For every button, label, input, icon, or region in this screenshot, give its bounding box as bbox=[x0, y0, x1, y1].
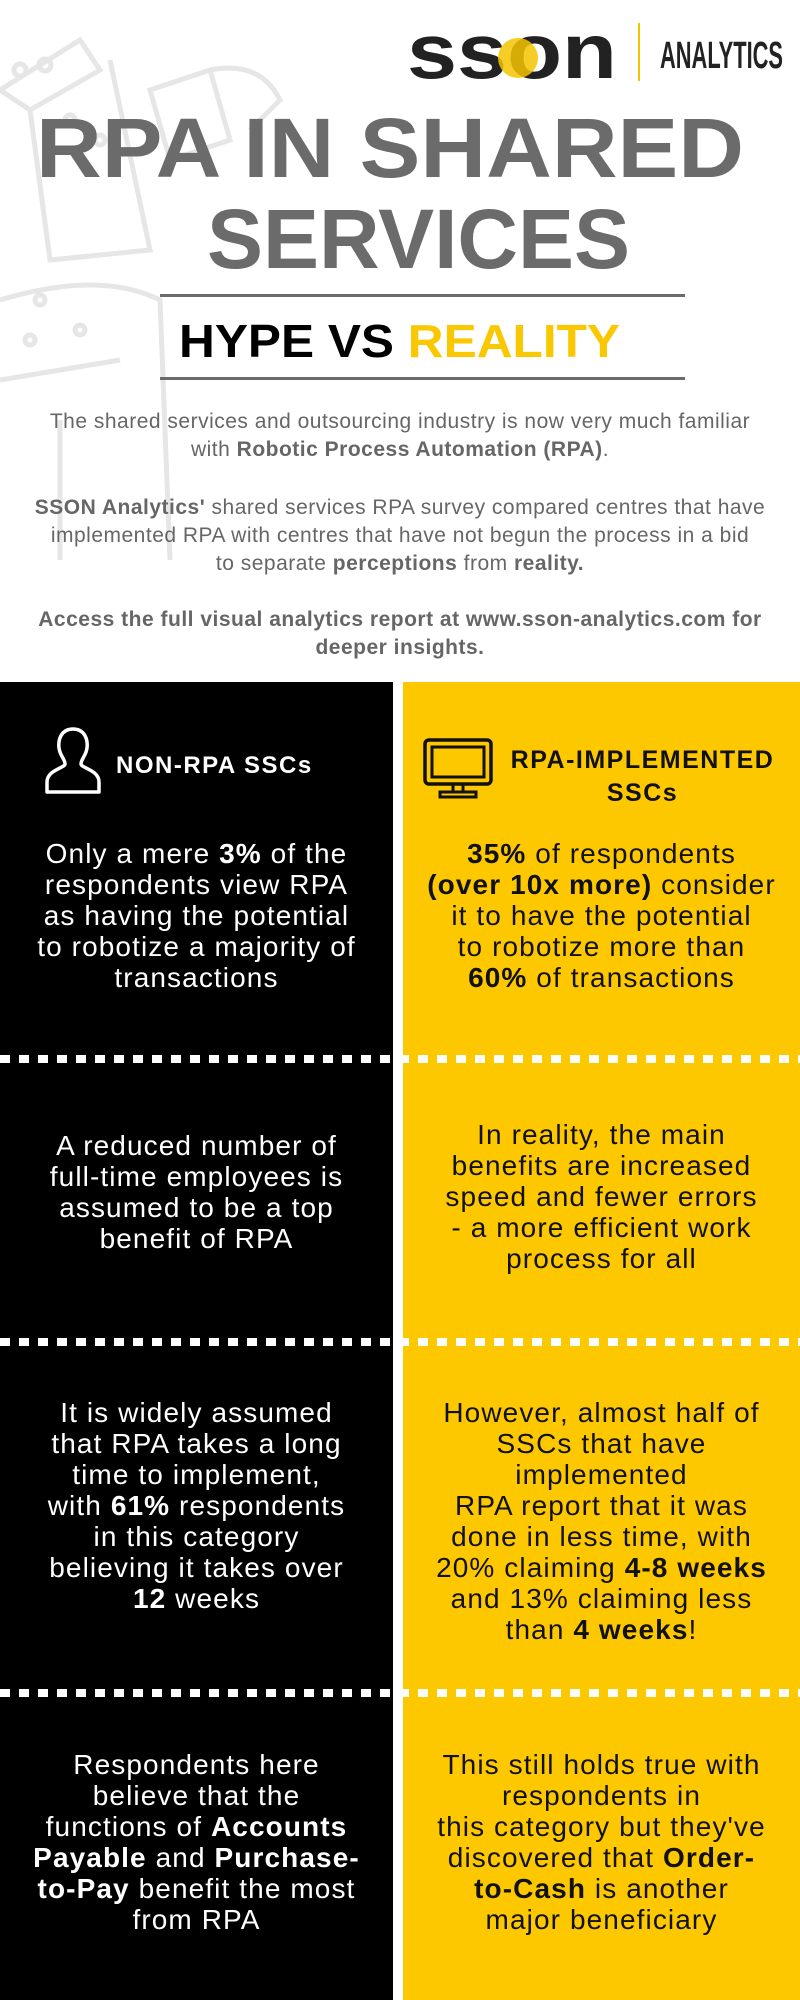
row 3 right: done in less time, with bbox=[451, 1521, 752, 1552]
row 3 right: However, almost half of bbox=[443, 1397, 760, 1428]
row 3 right: RPA report that it was bbox=[455, 1490, 748, 1521]
heading: RPA-implemented: RPA-IMPLEMENTED bbox=[511, 746, 774, 774]
row 1 right: 35% of respondents bbox=[467, 838, 736, 869]
panel: RPA-implemented bbox=[403, 682, 800, 2000]
intro text bbox=[50, 410, 750, 461]
row 3 left: 12 weeks bbox=[133, 1583, 260, 1614]
row 4 left: believe that the bbox=[93, 1780, 300, 1811]
row 3 left: in this category bbox=[94, 1521, 299, 1552]
logo bbox=[407, 18, 783, 88]
row 2 right: speed and fewer errors bbox=[445, 1181, 758, 1212]
row 1 right: 60% of transactions bbox=[468, 962, 735, 993]
row 4 right bbox=[437, 1749, 766, 1935]
row 4 right: this category but they've bbox=[437, 1811, 766, 1842]
access text: Access the full visual analytics report at www.sson-analytics.com for bbox=[38, 608, 762, 631]
row 4 left: Payable and Purchase- bbox=[33, 1842, 360, 1873]
row 3 left: time to implement, bbox=[72, 1459, 321, 1490]
heading: RPA-implemented: SSCs bbox=[607, 779, 678, 807]
row 3 left: that RPA takes a long bbox=[51, 1428, 342, 1459]
panel: non-RPA bbox=[0, 682, 393, 2000]
survey text: SSON Analytics' shared services RPA survey compared centres that have bbox=[35, 496, 765, 519]
row 1 left: transactions bbox=[114, 962, 279, 993]
intro text: with Robotic Process Automation (RPA). bbox=[191, 438, 609, 461]
row 2 left: A reduced number of bbox=[56, 1130, 337, 1161]
row 3 right: implemented bbox=[515, 1459, 688, 1490]
icon: person bbox=[45, 727, 101, 794]
row 2 left: benefit of RPA bbox=[100, 1223, 293, 1254]
survey text bbox=[35, 496, 765, 575]
row 2 right: benefits are increased bbox=[452, 1150, 751, 1181]
row 2 right: In reality, the main bbox=[477, 1119, 726, 1150]
row 4 right: major beneficiary bbox=[486, 1904, 717, 1935]
row 3 right: and 13% claiming less bbox=[451, 1583, 752, 1614]
row 1 right: (over 10x more) consider bbox=[427, 869, 776, 900]
row 3 right bbox=[436, 1397, 767, 1645]
row 2 left: full-time employees is bbox=[50, 1161, 343, 1192]
row 3 left: believing it takes over bbox=[49, 1552, 344, 1583]
title: RPA IN SHARED bbox=[36, 101, 744, 195]
row 1 left: respondents view RPA bbox=[45, 869, 348, 900]
row 4 right: This still holds true with bbox=[442, 1749, 761, 1780]
row 2 right: - a more efficient work bbox=[451, 1212, 752, 1243]
row 1 right: it to have the potential bbox=[451, 900, 752, 931]
row 3 left: It is widely assumed bbox=[60, 1397, 333, 1428]
row 1 left bbox=[37, 838, 356, 993]
heading: RPA-implemented bbox=[511, 746, 774, 807]
row 3 right: 20% claiming 4-8 weeks bbox=[436, 1552, 767, 1583]
row 2 left: assumed to be a top bbox=[59, 1192, 334, 1223]
row 4 left bbox=[33, 1749, 360, 1935]
heading: non-RPA: NON-RPA SSCs bbox=[116, 752, 313, 779]
row 4 right: respondents in bbox=[502, 1780, 701, 1811]
survey text: implemented RPA with centres that have not begun the process in a bid bbox=[51, 524, 749, 547]
background robot sketch bbox=[0, 36, 283, 560]
row 4 left: Respondents here bbox=[73, 1749, 320, 1780]
row 4 right: to-Cash is another bbox=[474, 1873, 729, 1904]
row 4 right: discovered that Order- bbox=[448, 1842, 755, 1873]
access text bbox=[38, 608, 762, 659]
row 3 right: than 4 weeks! bbox=[506, 1614, 697, 1645]
row 1 right bbox=[427, 838, 776, 993]
intro text: The shared services and outsourcing industry is now very much familiar bbox=[50, 410, 750, 433]
row 4 left: functions of Accounts bbox=[46, 1811, 347, 1842]
row 1 right: to robotize more than bbox=[458, 931, 745, 962]
row 4 left: from RPA bbox=[132, 1904, 261, 1935]
row 2 left bbox=[50, 1130, 343, 1254]
survey text: to separate perceptions from reality. bbox=[216, 552, 584, 575]
title bbox=[36, 101, 744, 280]
row 3 right: SSCs that have bbox=[497, 1428, 706, 1459]
row 3 left: with 61% respondents bbox=[48, 1490, 345, 1521]
row 2 right bbox=[445, 1119, 758, 1274]
row 1 left: Only a mere 3% of the bbox=[46, 838, 347, 869]
icon: monitor bbox=[423, 738, 493, 798]
row 1 left: as having the potential bbox=[44, 900, 349, 931]
row 3 left bbox=[48, 1397, 345, 1614]
row 2 right: process for all bbox=[506, 1243, 697, 1274]
row 1 left: to robotize a majority of bbox=[37, 931, 356, 962]
row 4 left: to-Pay benefit the most bbox=[38, 1873, 355, 1904]
access text: deeper insights. bbox=[315, 636, 485, 659]
